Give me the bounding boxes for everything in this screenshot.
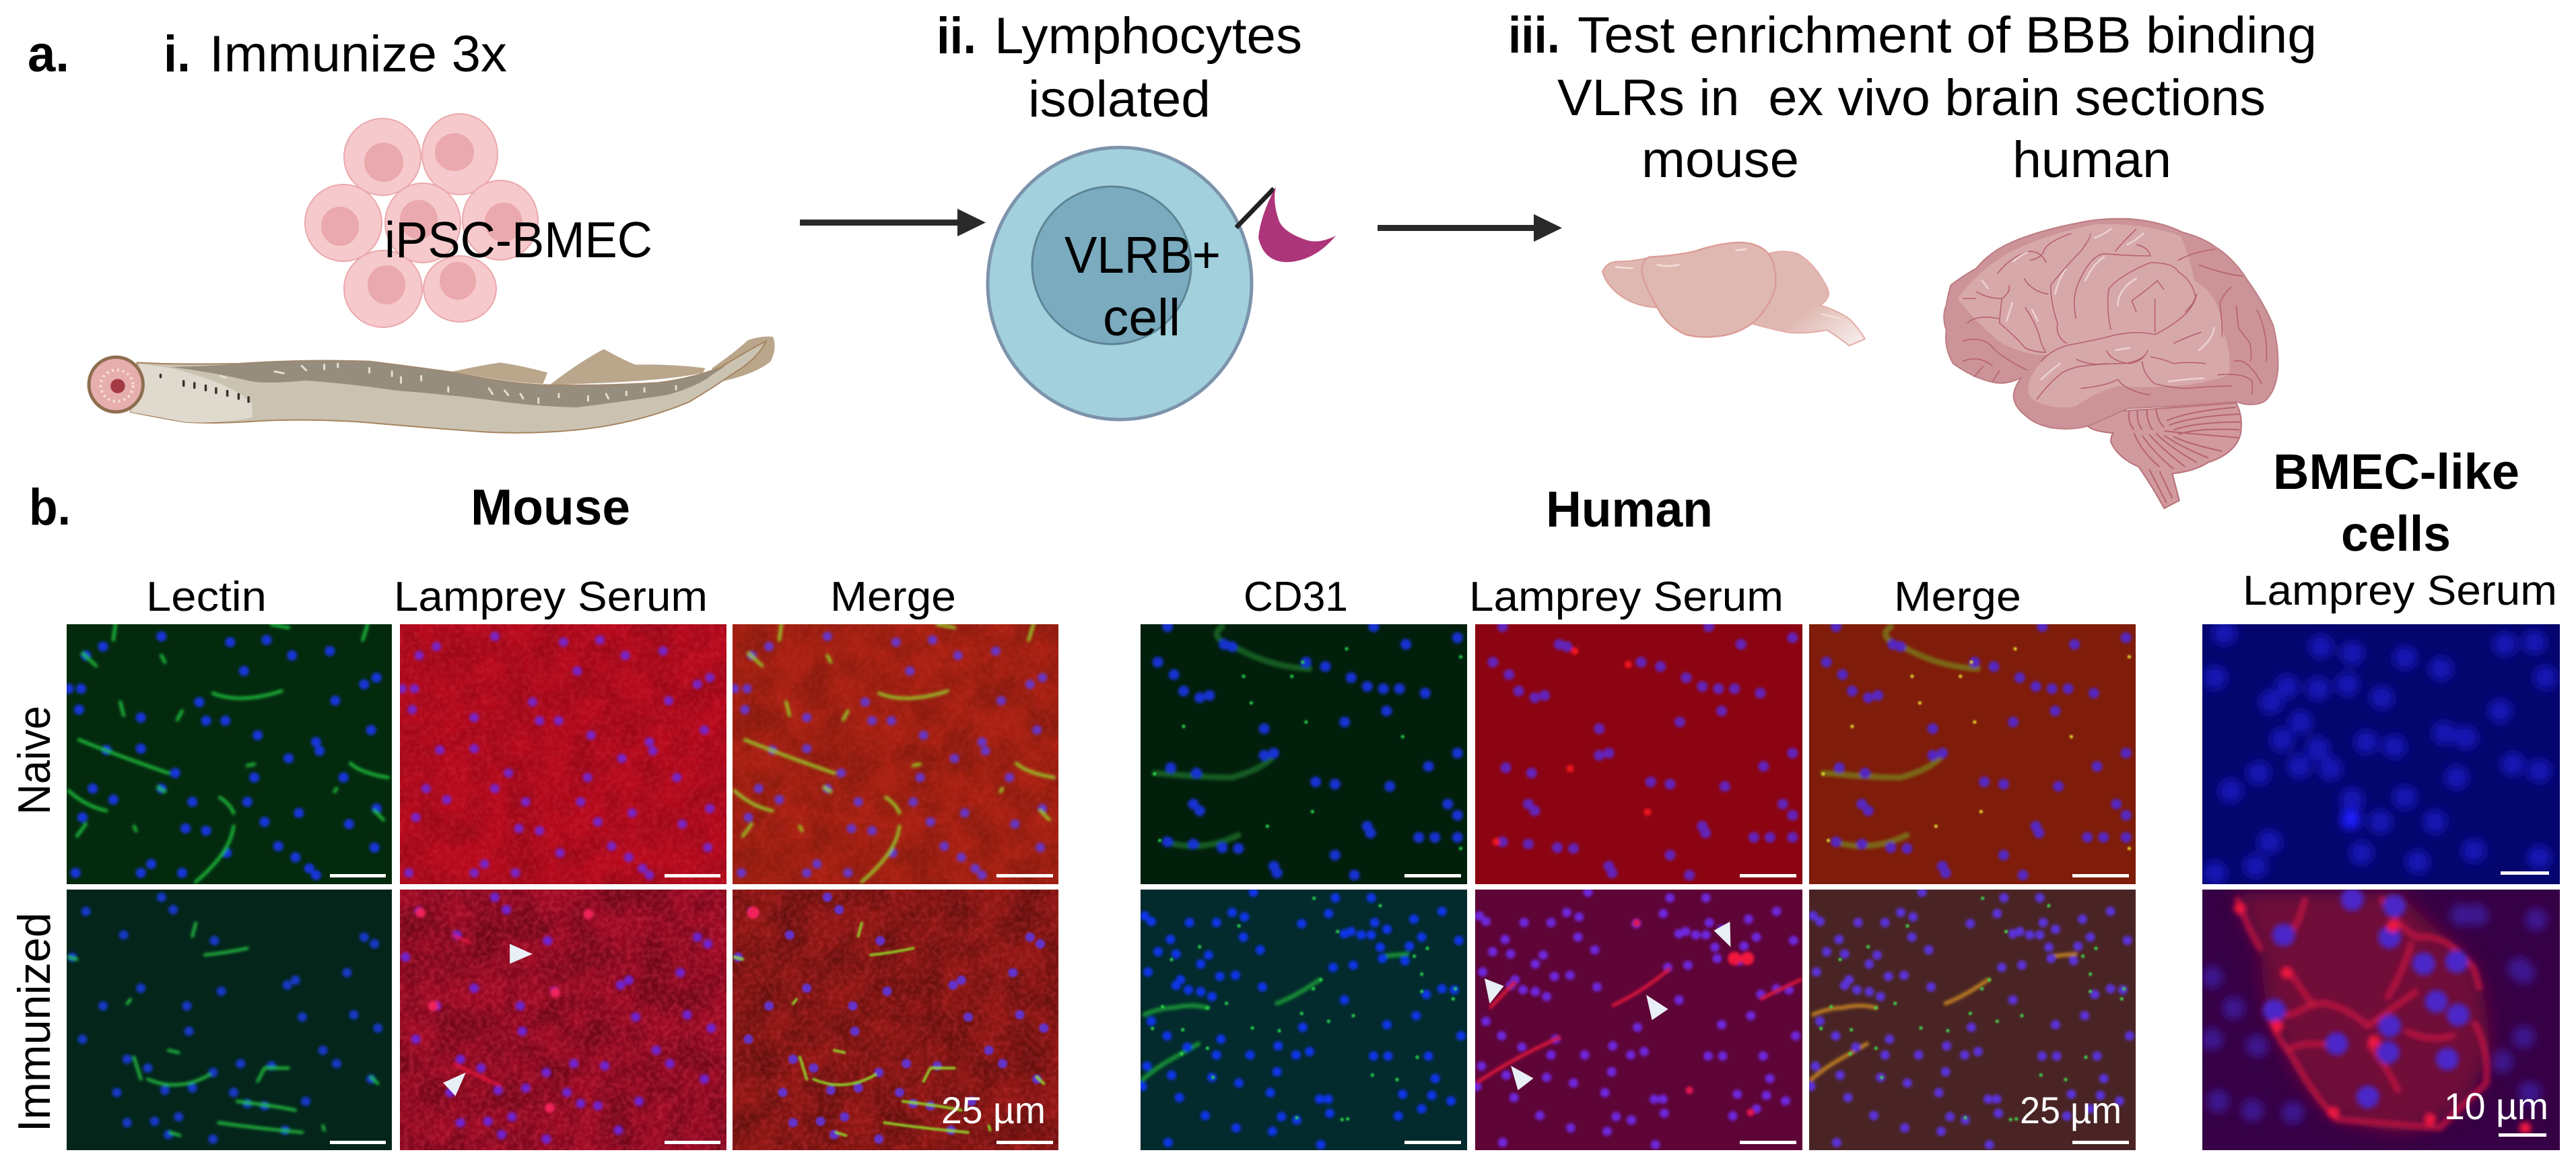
scale label: 10 µm: 10 µm bbox=[2444, 1085, 2548, 1127]
micrograph: mouse immunized serum bbox=[400, 890, 726, 1150]
scale bars bbox=[330, 871, 2549, 1144]
icon: arrowheads (mouse immunized serum) bbox=[443, 944, 533, 1096]
icon: VLRB+ cell bbox=[988, 147, 1252, 420]
label: VLRB+ cell: cell bbox=[1103, 289, 1180, 347]
heading: ii. Lymphocytes isolated bbox=[937, 7, 1302, 128]
column label: Lamprey Serum (BMEC): Lamprey Serum bbox=[2243, 568, 2557, 614]
row label: Naive: Naive bbox=[9, 706, 60, 815]
column label: Merge (human): Merge bbox=[1894, 574, 2021, 620]
label: mouse: mouse bbox=[1641, 131, 1799, 189]
column label: Lamprey Serum (human): Lamprey Serum bbox=[1469, 574, 1784, 620]
micrograph: human naive merge bbox=[1809, 624, 2136, 884]
micrograph: mouse naive lectin bbox=[67, 624, 392, 884]
micrograph: BMEC immunized bbox=[2202, 890, 2560, 1150]
label: iPSC-BMEC: iPSC-BMEC bbox=[384, 211, 652, 268]
heading: BMEC-like cells: cells bbox=[2341, 506, 2451, 562]
micrograph: human immunized CD31 bbox=[1141, 890, 1467, 1150]
heading: iii. Test enrichment of BBB binding VLRs in ex vivo brain sections: iii. bbox=[1508, 7, 1560, 64]
heading: iii. Test enrichment of BBB binding VLRs in ex vivo brain sections: VLRs in ex vivo brain sections bbox=[1557, 69, 2266, 127]
column label: Lectin: Lectin bbox=[146, 574, 267, 620]
heading: i. Immunize 3x: i. bbox=[164, 26, 191, 83]
scale label: 25 µm (human): 25 µm bbox=[2020, 1089, 2122, 1131]
heading: BMEC-like cells bbox=[2273, 444, 2519, 562]
column label: Merge (mouse): Merge bbox=[830, 574, 956, 620]
micrograph: mouse naive serum bbox=[400, 624, 726, 884]
row label: Immunized: Immunized bbox=[9, 912, 60, 1132]
column label: CD31: CD31 bbox=[1244, 574, 1348, 620]
micrograph: mouse naive merge bbox=[733, 624, 1058, 884]
icon: mouse brain bbox=[1602, 242, 1865, 345]
micrograph: human immunized serum bbox=[1475, 890, 1802, 1150]
heading: ii. Lymphocytes isolated: ii. bbox=[937, 7, 976, 65]
icon: arrowheads (human immunized serum) bbox=[1485, 922, 1730, 1090]
heading: Human: Human bbox=[1546, 481, 1713, 537]
label: human: human bbox=[2012, 131, 2171, 189]
icon: human brain bbox=[1944, 219, 2278, 508]
heading: i. Immunize 3x: Immunize 3x bbox=[209, 26, 507, 83]
heading: Mouse: Mouse bbox=[471, 479, 630, 535]
micrograph: mouse immunized lectin bbox=[67, 890, 392, 1150]
micrograph: mouse immunized merge bbox=[733, 890, 1058, 1150]
arrow: to brain sections step bbox=[1378, 214, 1562, 242]
heading: ii. Lymphocytes isolated: isolated bbox=[1028, 71, 1211, 128]
heading: ii. Lymphocytes isolated: Lymphocytes bbox=[994, 7, 1302, 65]
heading: iii. Test enrichment of BBB binding VLRs in ex vivo brain sections: Test enrichment of BBB binding bbox=[1578, 7, 2317, 64]
scale label: 25 µm (mouse): 25 µm bbox=[941, 1089, 1046, 1131]
heading: BMEC-like cells: BMEC-like bbox=[2273, 444, 2519, 500]
micrograph: human naive serum bbox=[1475, 624, 1802, 884]
heading: iii. Test enrichment of BBB binding VLRs in ex vivo brain sections bbox=[1508, 7, 2317, 127]
panel label: a.: a. bbox=[28, 26, 69, 83]
panel label: b.: b. bbox=[29, 479, 71, 536]
micrograph: BMEC naive bbox=[2202, 624, 2560, 884]
icon: lamprey bbox=[89, 337, 775, 433]
micrograph: human immunized merge bbox=[1809, 890, 2136, 1150]
micrograph: human naive CD31 bbox=[1141, 624, 1467, 884]
arrow: to lymphocyte step bbox=[800, 209, 986, 236]
label: VLRB+ cell: VLRB+ bbox=[1064, 226, 1221, 284]
icon: VLR antibody crescent bbox=[1236, 187, 1336, 262]
icon: iPSC-BMEC cell cluster bbox=[305, 114, 538, 327]
label: VLRB+ cell bbox=[1064, 226, 1221, 347]
column label: Lamprey Serum (mouse): Lamprey Serum bbox=[394, 574, 708, 620]
